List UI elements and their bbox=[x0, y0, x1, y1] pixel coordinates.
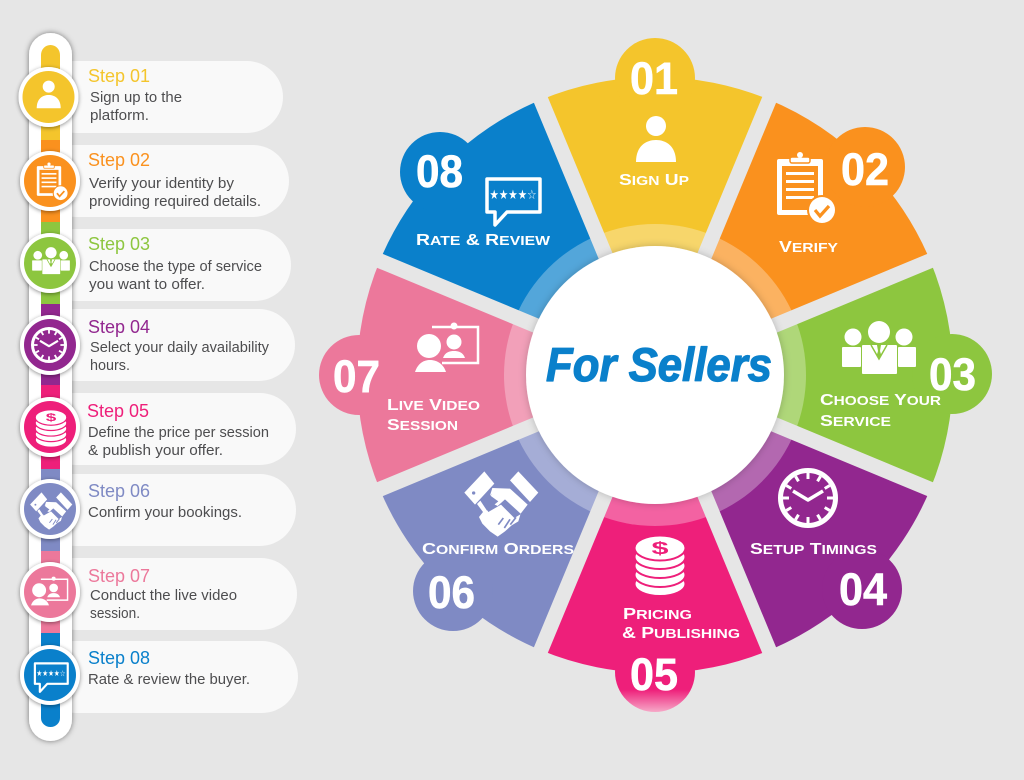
text: step 04: Select your daily availability bbox=[90, 339, 269, 356]
wedge 05 pink bbox=[541, 375, 769, 712]
step 05 pill bbox=[40, 393, 296, 465]
icon: step 06 badge bbox=[20, 479, 80, 539]
text: step 03: Choose the type of service bbox=[89, 258, 262, 275]
text: step 01: platform. bbox=[90, 107, 149, 124]
text: step 02: Step 02 bbox=[88, 150, 150, 170]
label: confirm orders: CONFIRM O RDERS bbox=[422, 541, 574, 558]
wedge 01 yellow bbox=[541, 38, 769, 375]
wedge 06 periwinkle bbox=[380, 375, 655, 650]
step 04 pill bbox=[40, 309, 295, 381]
text: step 05: Define the price per session bbox=[88, 424, 269, 441]
timeline colour strip bbox=[41, 45, 60, 727]
text: step 07: Step 07 bbox=[88, 566, 150, 586]
step 08 pill bbox=[40, 641, 298, 713]
text: step 03: you want to offer. bbox=[89, 276, 205, 293]
icon: handshake bbox=[464, 471, 538, 537]
step 06 pill bbox=[40, 474, 296, 546]
number 06: 06 bbox=[428, 567, 475, 618]
wedge 08 blue bbox=[380, 100, 655, 375]
wedge 03 green bbox=[655, 261, 992, 489]
centre title: For Sellers bbox=[546, 338, 772, 391]
icon: timing clock bbox=[780, 470, 836, 526]
icon: step 02 badge bbox=[20, 151, 80, 211]
text: step 06 bbox=[88, 481, 242, 521]
icon: sign up person bbox=[636, 116, 676, 162]
wedge 02 orange bbox=[655, 100, 930, 375]
icon: step 07 badge bbox=[20, 562, 80, 622]
text: step 04 bbox=[88, 317, 269, 374]
icon: step 05 badge bbox=[20, 397, 80, 457]
step 07 pill bbox=[40, 558, 297, 630]
text: step 01 bbox=[88, 66, 182, 124]
label: choose your service bbox=[820, 392, 942, 430]
centre circle bbox=[526, 246, 784, 504]
label: live video session: SESSION bbox=[387, 417, 458, 434]
text: step 06: Step 06 bbox=[88, 481, 150, 501]
text: step 08 bbox=[88, 648, 250, 688]
icon: step 01 badge bbox=[18, 67, 78, 127]
text: step 06: Confirm your bookings. bbox=[88, 504, 242, 521]
label: pricing and publishing: & P UBLISHING bbox=[622, 625, 740, 642]
text: step 08: Rate & review the buyer. bbox=[88, 671, 250, 688]
label: choose your service: SERVICE bbox=[820, 413, 891, 430]
icon: live video bbox=[414, 322, 478, 372]
text: step 02: Verify your identity by bbox=[89, 175, 234, 192]
icon: verify clipboard bbox=[777, 152, 837, 225]
number 08: 08 bbox=[416, 146, 463, 197]
icon: service team bbox=[842, 321, 916, 374]
label: sign up: SIGN UP bbox=[619, 172, 689, 189]
text: step 03 bbox=[88, 234, 262, 293]
icon: step 08 badge bbox=[20, 645, 80, 705]
label: live video session bbox=[387, 397, 480, 434]
panel: step list bbox=[18, 33, 298, 741]
label: choose your service: CHOOSE YOUR bbox=[820, 392, 942, 409]
label: live video session: LIVE VIDEO bbox=[387, 397, 480, 414]
label: rate and review: RATE & R EVIEW bbox=[416, 232, 551, 249]
wedge 07 rose bbox=[319, 261, 655, 489]
icon: review bubble bbox=[487, 179, 540, 225]
panel: wheel diagram bbox=[319, 38, 992, 712]
text: step 04: hours. bbox=[90, 357, 130, 374]
number 05: 05 bbox=[630, 649, 678, 700]
text: step 05: & publish your offer. bbox=[88, 442, 223, 459]
step 01 pill bbox=[40, 61, 283, 133]
wedge 04 purple bbox=[655, 375, 930, 650]
text: step 02 bbox=[88, 150, 261, 210]
number 03: 03 bbox=[929, 349, 976, 400]
timeline white rail bbox=[29, 33, 72, 741]
text: step 04: Step 04 bbox=[88, 317, 150, 337]
text: step 07 bbox=[88, 566, 237, 622]
translucent ring bbox=[504, 224, 806, 526]
step 03 pill bbox=[40, 229, 291, 301]
icon: step 04 badge bbox=[20, 315, 80, 375]
text: step 01: Sign up to the bbox=[90, 89, 182, 106]
icon: step 03 badge bbox=[20, 233, 80, 293]
text: step 07: Conduct the live video bbox=[90, 587, 237, 604]
text: step 05: Step 05 bbox=[87, 401, 149, 421]
text: step 08: Step 08 bbox=[88, 648, 150, 668]
text: step 07: session. bbox=[90, 605, 140, 622]
text: step 02: providing required details. bbox=[89, 193, 261, 210]
number 02: 02 bbox=[841, 144, 889, 195]
label: pricing and publishing: PRICING bbox=[623, 606, 692, 623]
label: verify: VERIFY bbox=[779, 239, 838, 256]
icon: pricing coins bbox=[634, 536, 686, 596]
step 02 pill bbox=[40, 145, 289, 217]
text: step 01: Step 01 bbox=[88, 66, 150, 86]
number 01: 01 bbox=[630, 53, 678, 104]
label: pricing and publishing bbox=[622, 606, 740, 642]
text: step 03: Step 03 bbox=[88, 234, 150, 254]
number 07: 07 bbox=[333, 351, 380, 402]
number 04: 04 bbox=[839, 564, 887, 615]
label: setup timings: SETUP TIMINGS bbox=[750, 541, 877, 558]
text: step 05 bbox=[87, 401, 269, 459]
